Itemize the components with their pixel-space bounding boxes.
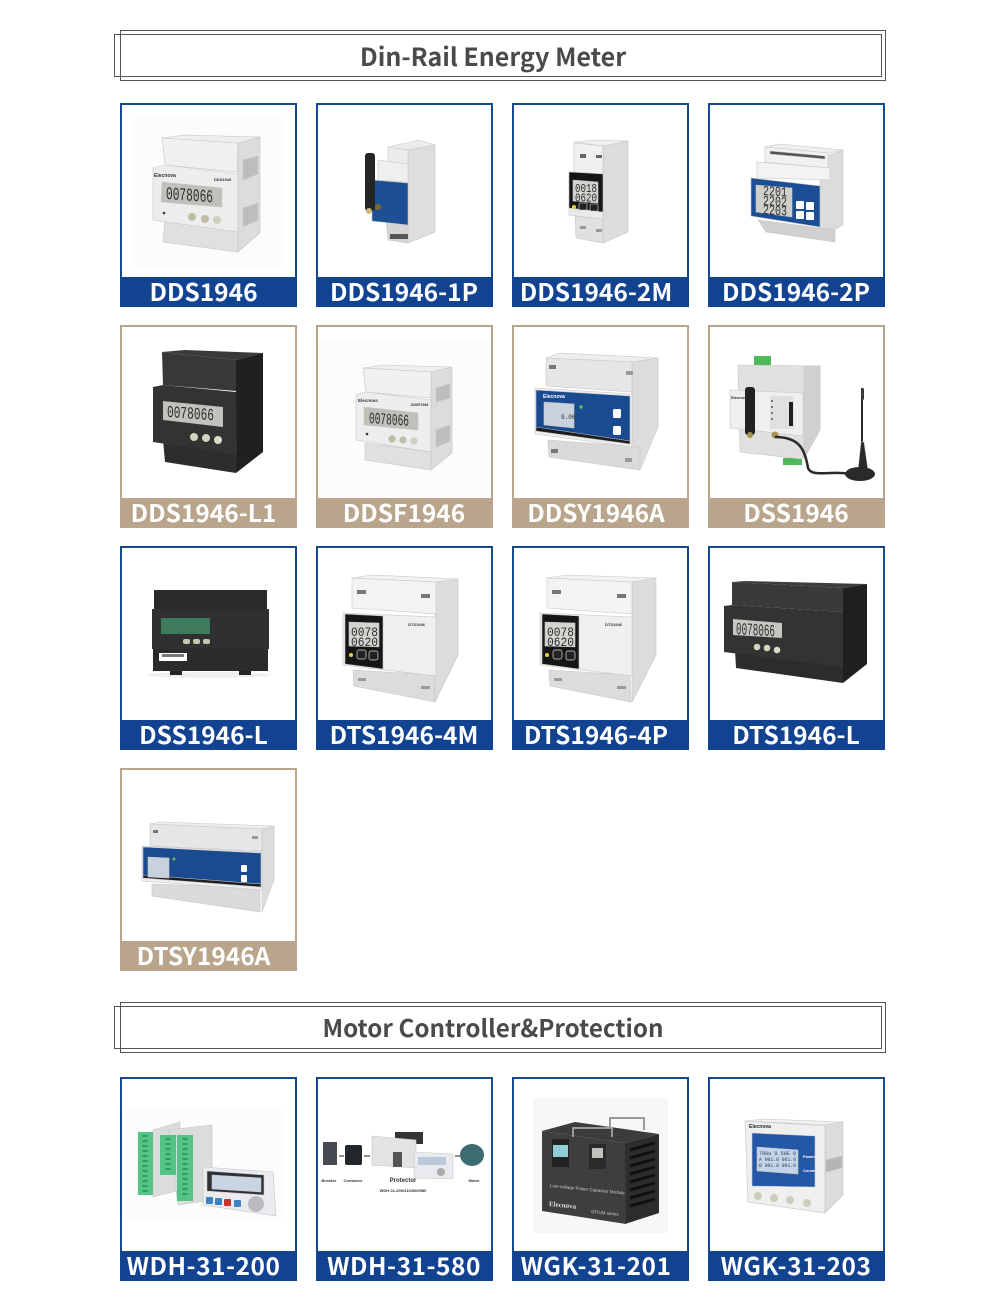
card: DDS1946-2P [708,104,885,309]
product image: DTS1946-4P meter: DTS1946 [605,622,623,627]
label: DDS1946-1P: DDS1946-1P [330,274,478,309]
product image: WDH-31-580 wiring diagram: Motor [468,1178,480,1183]
product image: DDS1946-2P meter [751,144,843,242]
card: DDS1946-1P [316,104,493,309]
label: DDS1946-2M: DDS1946-2M [520,274,672,309]
card: DSS1946 [708,326,885,530]
card: DDSF1946 [316,326,493,530]
product image: DTS1946-4P meter: 0620 [547,635,574,650]
product image: DTS1946-4P meter: 0078 [547,625,574,640]
product image: WGK-31-203 panel meter: Power [803,1154,815,1159]
product image: WGK-31-203 panel meter [745,1119,843,1213]
card: DTS1946-L [708,547,885,752]
heading: Motor Controller&Protection: Motor Controller&Protection [322,1009,664,1044]
heading: Motor Controller&Protection [114,1002,886,1052]
product image: WGK-31-201 capacitor module: Elecnova [549,1200,577,1211]
product image: DDSY1946A meter [535,353,658,470]
product image: DDS1946-1P module [365,140,435,243]
heading: Din-Rail Energy Meter: Din-Rail Energy Meter [360,38,626,74]
label: DDS1946: DDS1946 [149,274,258,309]
product image: DTS1946-L black meter: 0078066 [736,621,775,642]
arrow: protector to motor [455,1155,460,1157]
product image: DDSF1946 meter: 0078066 [369,410,409,431]
card: WGK-31-203 [708,1078,885,1283]
product image: WGK-31-203 panel meter: B 001.0 001.0 [759,1163,796,1169]
product image: WDH-31-580 wiring diagram: Contactor [344,1178,363,1183]
label: DDS1946-2P: DDS1946-2P [722,274,870,309]
card: DDS1946-L1 [120,326,297,530]
product image: DDS1946 meter: 0078066 [166,185,213,208]
product image: DDS1946 meter: Elecnova [154,173,176,179]
label: DSS1946: DSS1946 [743,495,849,530]
product image: DDS1946-2P meter: 2201 [763,184,787,201]
label: WDH-31-200: WDH-31-200 [127,1248,280,1283]
product image: WGK-31-203 panel meter: A 001.0 001.0 [759,1157,796,1163]
product image: DTS1946-4M meter: DTS1946 [408,622,426,627]
product image: DSS1946 gateway with antenna [730,356,875,481]
label: DDSY1946A: DDSY1946A [527,495,665,530]
product image: DDSF1946 meter: DDSF1946 [411,403,428,407]
heading: Din-Rail Energy Meter [114,30,886,80]
label: DTS1946-4M: DTS1946-4M [330,717,478,752]
label: WGK-31-203: WGK-31-203 [721,1248,871,1283]
product image: WDH-31-580 wiring diagram: Breaker [322,1178,337,1183]
card: DDS1946 [120,104,297,309]
product image: DDS1946-L1 black meter [153,350,263,473]
card: WGK-31-201 [512,1078,689,1283]
product image: WDH-31-580 wiring diagram: WDH-31-200/210/500/580 [380,1188,427,1193]
product image: DDSF1946 meter [318,340,491,497]
product image: DSS1946-L black meter [147,590,271,678]
card: DDS1946-2M [512,104,689,309]
label: DDSF1946 [316,495,493,530]
product image: WGK-31-203 panel meter: Elecnova [749,1124,771,1130]
product image: DSS1946 gateway with antenna: Elecnova [731,395,749,400]
product image: DDS1946-2M meter [569,140,628,243]
product image: DDS1946-2P meter: 2202 [763,194,787,211]
label: DDS1946 [120,274,297,309]
label: DDS1946-L1: DDS1946-L1 [131,495,276,530]
product image: DDS1946-2M meter: 0620 [575,192,597,206]
product image: DDSY1946A meter: 9.06 [561,414,576,421]
label: DSS1946 [708,495,885,530]
label: DTS1946-4P: DTS1946-4P [524,717,668,752]
label: DDSF1946: DDSF1946 [343,495,465,530]
product image: DTS1946-4M meter [343,575,458,702]
product image: DTS1946-4P meter [540,575,656,702]
product image: WDH-31-580 wiring diagram [322,1132,484,1193]
product image: DDS1946 meter [133,116,283,266]
product image: DTS1946-L black meter [724,581,867,683]
product image: WGK-31-203 panel meter: Comm [803,1168,816,1173]
card: WDH-31-200 [120,1078,297,1283]
label: DSS1946-L: DSS1946-L [139,717,268,752]
card: WDH-31-580 [316,1078,493,1283]
product image: WGK-31-201 capacitor module [533,1098,668,1233]
card: DSS1946-L [120,547,297,752]
product image: DDS1946-2M meter: 0018 [575,182,597,196]
card: DTSY1946A [120,769,297,973]
product image: DTSY1946A meter [142,822,274,912]
product image: DDS1946 meter: DDS1946 [214,177,232,182]
label: WGK-31-201: WGK-31-201 [521,1248,671,1283]
card: DTS1946-4P [512,547,689,752]
product image: WGK-31-201 capacitor module: GFIUM series [591,1209,619,1217]
card: DTS1946-4M [316,547,493,752]
arrow: breaker to contactor [339,1155,344,1157]
product image: DDS1946-2P meter: 2203 [763,203,787,220]
product image: DTS1946-4M meter: 0620 [351,635,378,650]
label: DTS1946-L: DTS1946-L [732,717,860,752]
product image: DTS1946-4M meter: 0078 [351,625,378,640]
product image: DDSF1946 meter: Elecnova [358,398,378,403]
product image: WGK-31-203 panel meter: 790u 9 59E 9 [759,1151,796,1157]
product image: DDS1946-L1 black meter: 0078066 [167,404,214,426]
product image: DDSY1946A meter: Elecnova [543,394,565,400]
label: WDH-31-580: WDH-31-580 [327,1248,481,1283]
arrow: contactor to protector [364,1155,370,1157]
label: DTSY1946A: DTSY1946A [137,938,271,973]
product image: WDH-31-580 wiring diagram: Protector [390,1178,417,1184]
card: DDSY1946A [512,326,689,530]
product image: WGK-31-201 capacitor module: Low-voltage Power Capacitor Module [550,1183,625,1196]
product image: WDH-31-200 controller and modules [127,1108,285,1220]
